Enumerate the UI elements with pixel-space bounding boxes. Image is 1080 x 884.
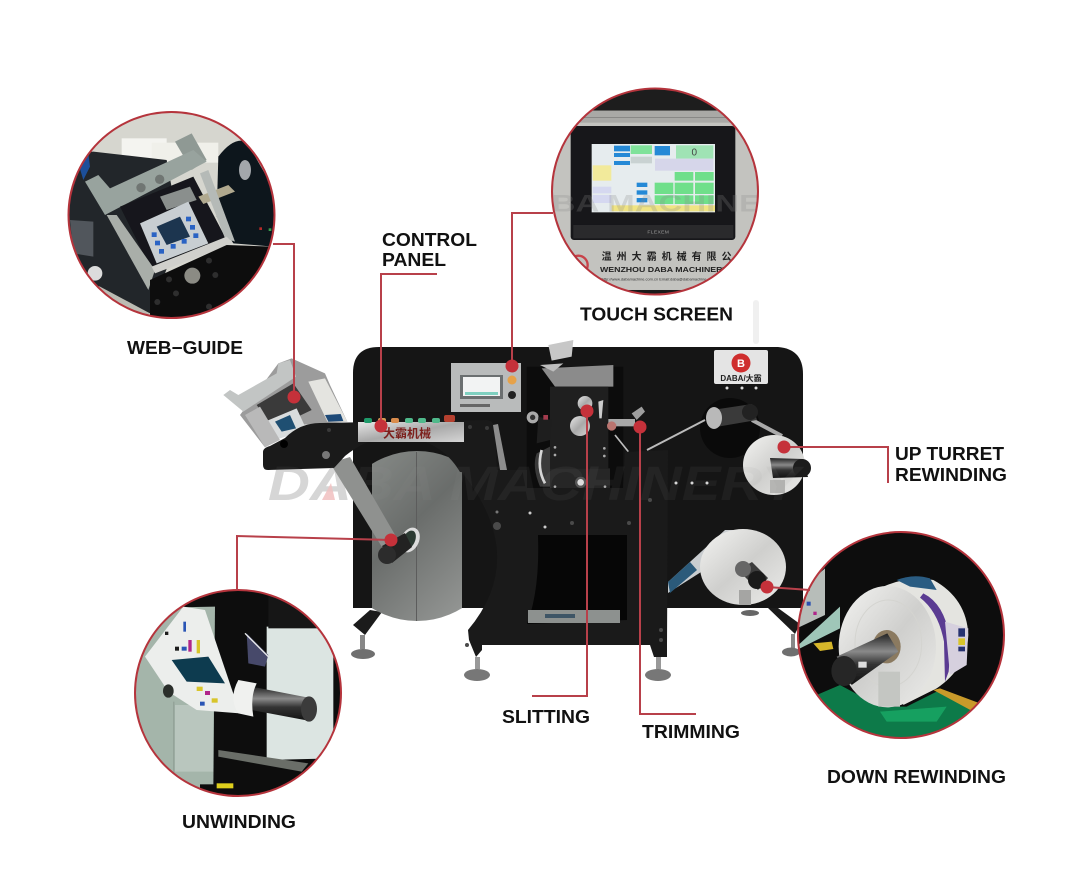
shaft: [252, 687, 310, 721]
machine: [223, 300, 811, 681]
leader: unwinding: [237, 536, 391, 590]
photo circle: down rewinding: [797, 531, 1005, 739]
unwinding shaft and roll: [378, 524, 424, 564]
label: touch screen: TOUCH SCREEN: [580, 304, 733, 324]
leader: control panel: [381, 274, 437, 426]
photo circle: touch screen: BA MACHINER: [552, 190, 785, 217]
label: slitting: SLITTING: [502, 707, 590, 727]
arm web strip: [493, 424, 507, 470]
label: control panel: PANEL: [382, 250, 446, 270]
leader: up turret rewinding: [784, 447, 888, 483]
label: unwinding: UNWINDING: [182, 812, 296, 832]
label: web-guide: WEB−GUIDE: [127, 338, 243, 358]
photo circle: touch screen: [551, 88, 759, 296]
roll face: [839, 586, 936, 707]
panel dots: [674, 386, 758, 484]
marker dots: [288, 360, 790, 594]
brand plate: [714, 350, 768, 384]
frame feet: [464, 657, 671, 681]
label: up turret rewinding: [895, 444, 1007, 485]
unwinding web: [330, 457, 398, 552]
shaft: [837, 633, 898, 685]
photo circle: touch screen: http://www.dabamachine.com.cn Email:daba@dabamachine.com: [602, 277, 715, 281]
leader: down rewinding: [767, 587, 810, 590]
label: trimming: TRIMMING: [642, 722, 740, 742]
machine rear panel: [353, 347, 803, 608]
lower rewinding roll: [668, 529, 786, 605]
control buttons strip: 大霸机械: [383, 424, 431, 442]
upper turret shaft: [647, 398, 782, 458]
watermark behind machine: DABA MACHINERY: [268, 458, 805, 511]
control buttons strip: [358, 415, 464, 442]
right floor foot: [741, 608, 800, 656]
brand plate: B: [737, 358, 745, 370]
left arm: [263, 420, 497, 472]
nameplate: 温州大霸机械有限公: [602, 248, 737, 263]
cable tag: [753, 300, 759, 344]
upper rewinding roll: [743, 435, 811, 495]
photo circle: unwinding: [134, 589, 342, 797]
monitor: [571, 126, 735, 240]
unwinding disc: [372, 451, 462, 621]
photo circle: web-guide: [68, 111, 276, 319]
leader: trimming: [640, 427, 696, 714]
roll side: [883, 578, 968, 705]
frame window: [527, 535, 627, 624]
leader: web-guide: [273, 244, 294, 397]
label: up turret rewinding: UP TURRET: [895, 444, 1004, 464]
label: down rewinding: DOWN REWINDING: [827, 767, 1006, 787]
printed web: [145, 607, 240, 713]
label: control panel: [382, 230, 477, 270]
front frame: [460, 450, 668, 657]
label: up turret rewinding: REWINDING: [895, 465, 1007, 485]
frame bolts: [465, 498, 663, 647]
left floor foot: [351, 610, 382, 659]
web guide unit: [223, 358, 347, 447]
monitor: FLEXEM: [647, 230, 669, 236]
label: control panel: CONTROL: [382, 230, 477, 250]
arm bolts: [280, 425, 489, 459]
leader: touch screen: [512, 213, 553, 366]
callout lines and dots: [237, 213, 888, 714]
slitting compartment: [527, 340, 645, 488]
touch panel on machine: [451, 363, 521, 412]
photo circle: touch screen: WENZHOU DABA MACHINERY C: [600, 265, 737, 274]
monitor: 0: [692, 147, 698, 158]
leader: slitting: [532, 411, 587, 696]
brand plate: DABA/大霸: [720, 373, 762, 383]
watermark over machine: DABA MACHINERY: [268, 458, 805, 511]
